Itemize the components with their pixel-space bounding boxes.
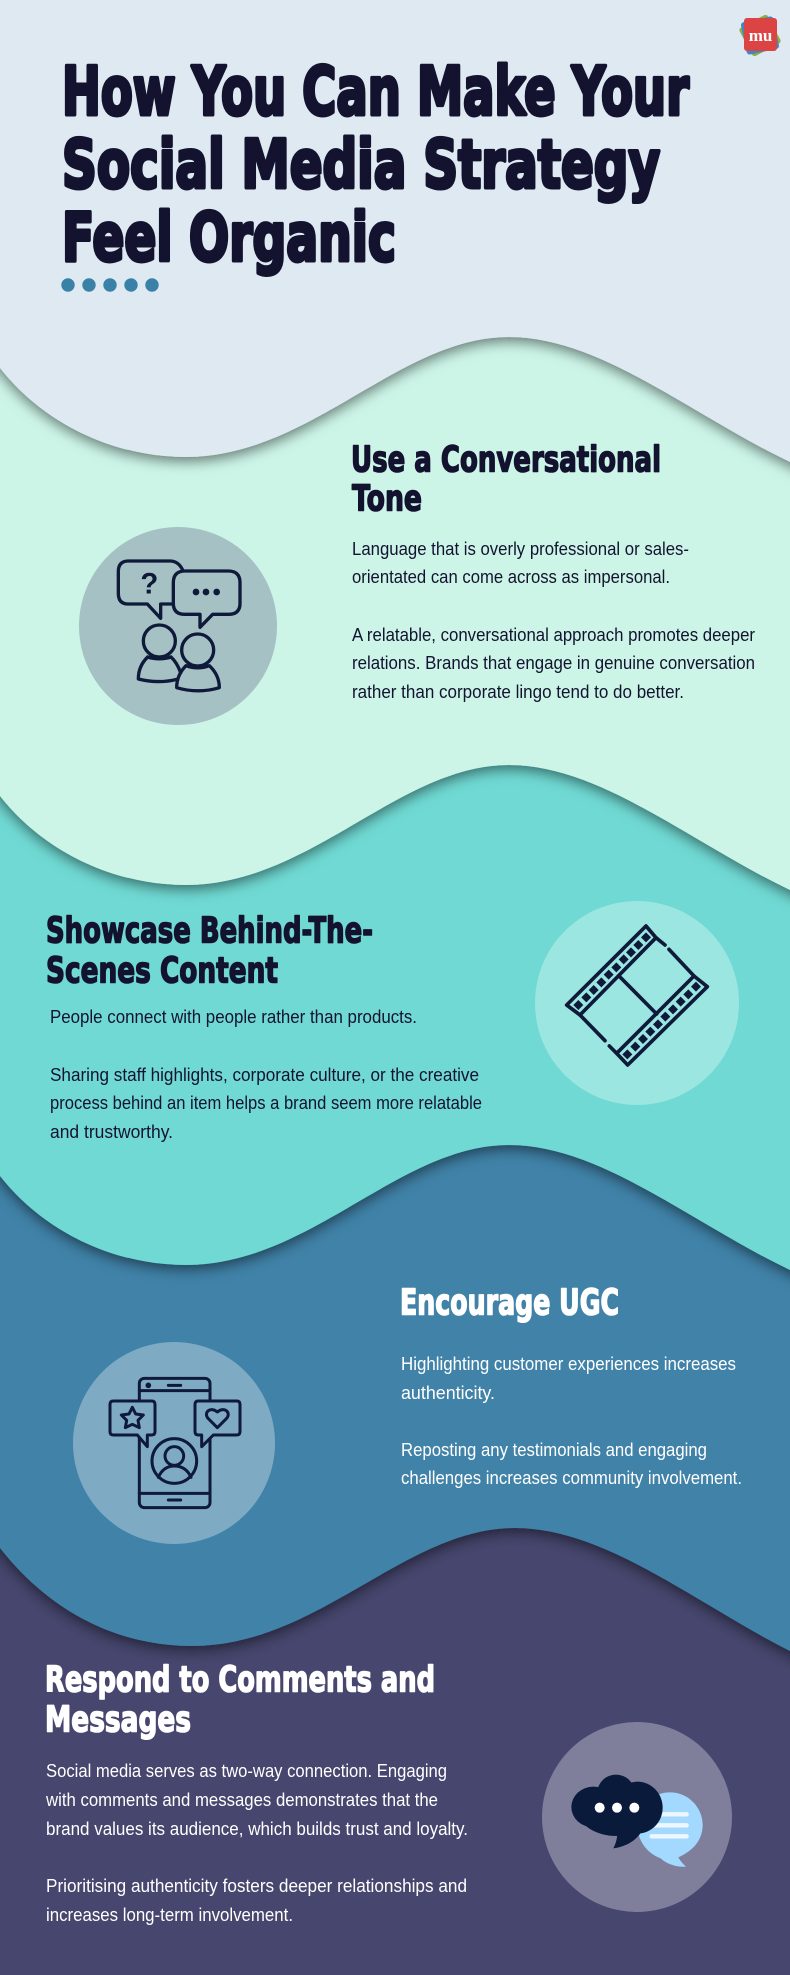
- icon circle: conversation: ?: [140, 567, 158, 600]
- body text: UGC: Highlighting customer experiences increases: [401, 1353, 736, 1374]
- title: [62, 52, 689, 276]
- heading: encourage UGC: Encourage UGC: [400, 1282, 619, 1324]
- heading: use a conversational tone: [351, 440, 661, 520]
- body text: behind the scenes: People connect with people rather than products.: [50, 1006, 417, 1027]
- panel: showcase behind-the-scenes content: [46, 901, 739, 1142]
- heading: showcase behind-the-scenes content: [46, 910, 373, 992]
- body text: conversational tone: relations. Brands that engage in genuine conversation: [352, 652, 755, 673]
- body text: respond: brand values its audience, which builds trust and loyalty.: [46, 1818, 468, 1839]
- icon circle: film strip: [535, 901, 739, 1105]
- body text: UGC: challenges increases community involvement.: [401, 1467, 742, 1488]
- body text: respond: with comments and messages demonstrates that the: [45, 1789, 438, 1810]
- panel: use a conversational tone: [79, 440, 755, 725]
- heading: showcase behind-the-scenes content: Scenes Content: [46, 950, 278, 992]
- panel: respond to comments and messages: [45, 1660, 732, 1925]
- heading: showcase behind-the-scenes content: Showcase Behind-The-: [46, 910, 373, 952]
- body text: UGC: Reposting any testimonials and engaging: [401, 1439, 707, 1460]
- title dots: [61, 278, 159, 292]
- heading: use a conversational tone: Tone: [352, 478, 422, 520]
- body text: conversational tone: A relatable, conversational approach promotes deeper: [352, 624, 755, 645]
- heading: use a conversational tone: Use a Conversational: [351, 440, 661, 480]
- body text: conversational tone: Language that is overly professional or sales-: [352, 538, 689, 559]
- icon circle: phone with reviews: [73, 1342, 275, 1544]
- body text: UGC: [401, 1353, 742, 1488]
- wave layer: mint: [0, 0, 790, 923]
- heading: respond to comments and messages: Respond to Comments and: [45, 1660, 435, 1700]
- wave layer: pale blue header: [0, 0, 790, 495]
- heading: respond to comments and messages: Messages: [45, 1700, 191, 1740]
- body text: conversational tone: [352, 538, 755, 702]
- body text: behind the scenes: process behind an item helps a brand seem more relatable: [50, 1092, 482, 1113]
- body text: UGC: authenticity.: [401, 1382, 495, 1403]
- body text: conversational tone: orientated can come across as impersonal.: [352, 566, 670, 587]
- icon circle: chat bubbles: [542, 1722, 732, 1912]
- body text: conversational tone: rather than corporate lingo tend to do better.: [352, 681, 684, 702]
- body text: respond: increases long-term involvement.: [46, 1904, 293, 1925]
- body text: behind the scenes: [50, 1006, 482, 1142]
- logo: mu: mu: [749, 26, 772, 45]
- body text: behind the scenes: and trustworthy.: [50, 1121, 173, 1142]
- body text: behind the scenes: Sharing staff highlights, corporate culture, or the creative: [50, 1064, 479, 1085]
- body text: respond: Social media serves as two-way connection. Engaging: [46, 1760, 447, 1781]
- icon circle: conversation: [79, 527, 277, 725]
- panel: encourage UGC: [73, 1282, 742, 1544]
- wave layer: teal: [0, 0, 790, 1303]
- title: Feel Organic: [62, 198, 396, 276]
- body text: respond: Prioritising authenticity fosters deeper relationships and: [46, 1875, 467, 1896]
- logo: mu: [738, 14, 782, 57]
- body text: respond: [45, 1760, 468, 1925]
- heading: respond to comments and messages: [45, 1660, 435, 1740]
